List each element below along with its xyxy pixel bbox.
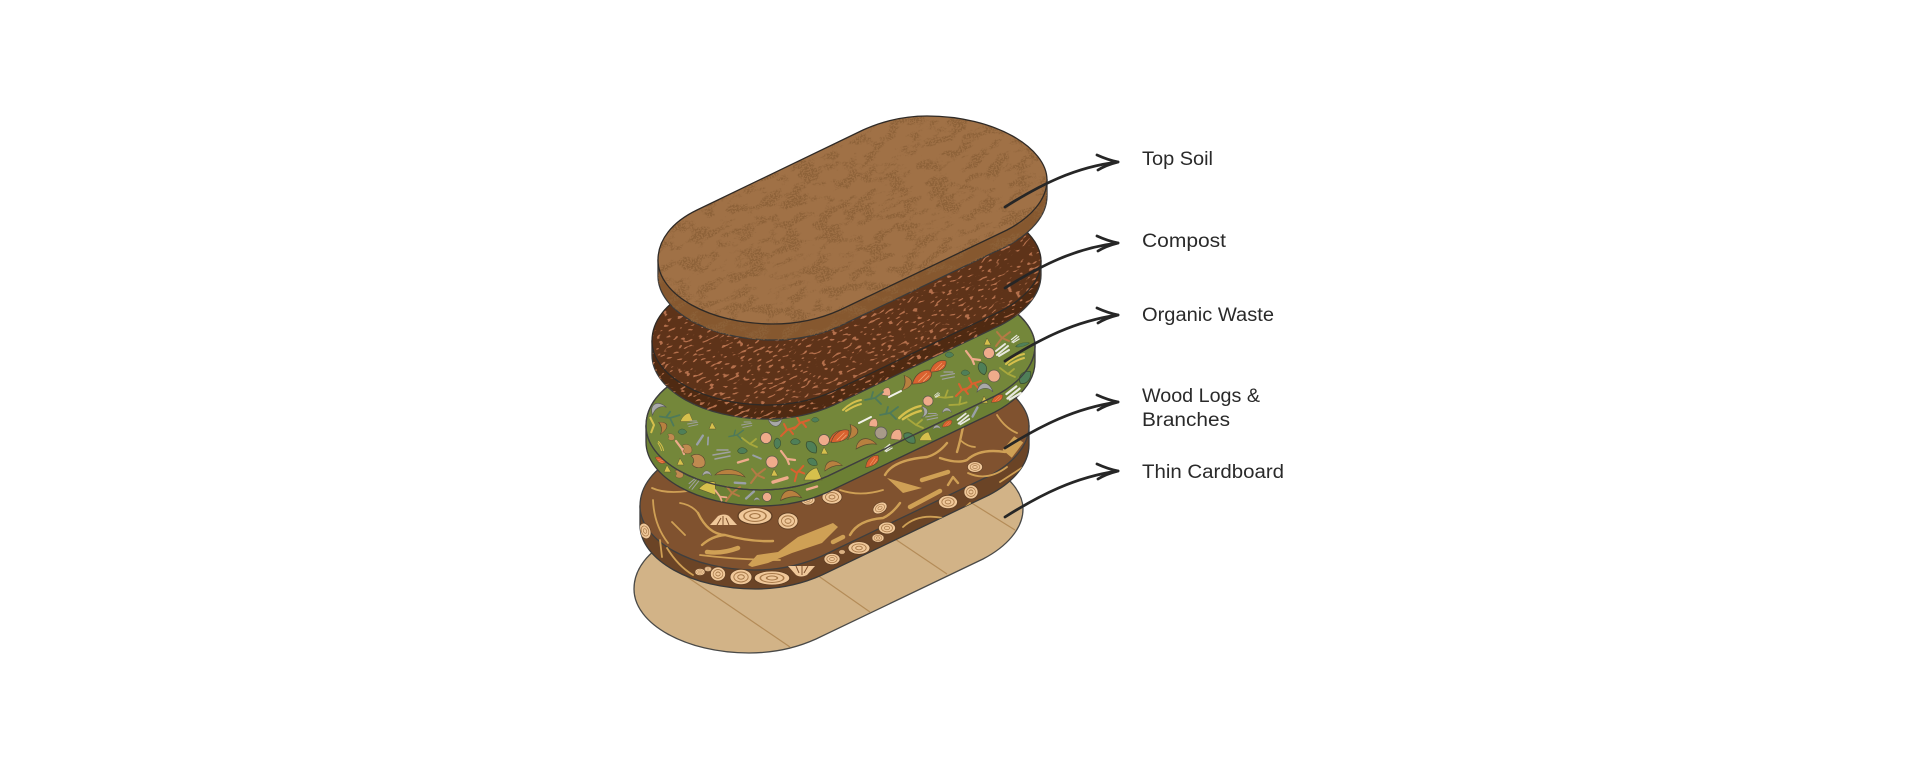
- wood branches and logs: [637, 415, 1024, 585]
- cardboard top face: [634, 445, 1023, 653]
- top soil side wall: [658, 180, 1047, 340]
- compost top face: [652, 197, 1041, 405]
- arrow: top soil: [1005, 155, 1118, 207]
- label: organic waste: Organic Waste: [1142, 305, 1274, 326]
- compost flecks: [652, 236, 1040, 419]
- layer: top soil: [657, 115, 1048, 341]
- organic top face: [646, 282, 1035, 490]
- top soil outline: [658, 116, 1047, 324]
- organic side wall: [646, 346, 1035, 506]
- layer: wood logs and branches: [639, 398, 1030, 590]
- label: thin cardboard: Thin Cardboard: [1142, 462, 1284, 483]
- label: wood logs and branches: Wood Logs &: [1142, 386, 1260, 407]
- arrow: compost: [1005, 236, 1118, 288]
- label: compost: Compost: [1142, 231, 1227, 252]
- top soil top face: [658, 116, 1047, 324]
- layer: organic waste: [646, 282, 1035, 506]
- layer: compost: [651, 232, 1042, 420]
- label: top soil: Top Soil: [1142, 149, 1213, 170]
- wood top face: [640, 362, 1029, 570]
- cardboard seams: [677, 502, 1015, 647]
- organic rim line: [646, 282, 1035, 490]
- compost outlines: [652, 197, 1041, 405]
- arrow: organic waste: [1005, 308, 1118, 361]
- wood side wall: [640, 426, 1029, 589]
- compost side wall: [652, 261, 1041, 419]
- layer: thin cardboard: [634, 445, 1023, 653]
- organic scraps: [648, 332, 1034, 503]
- top soil mottling: [658, 116, 1047, 340]
- label: wood logs and branches: [1142, 386, 1260, 431]
- arrow: thin cardboard: [1005, 464, 1118, 517]
- label: wood logs and branches: Branches: [1142, 410, 1230, 431]
- arrow: wood logs: [1005, 395, 1118, 448]
